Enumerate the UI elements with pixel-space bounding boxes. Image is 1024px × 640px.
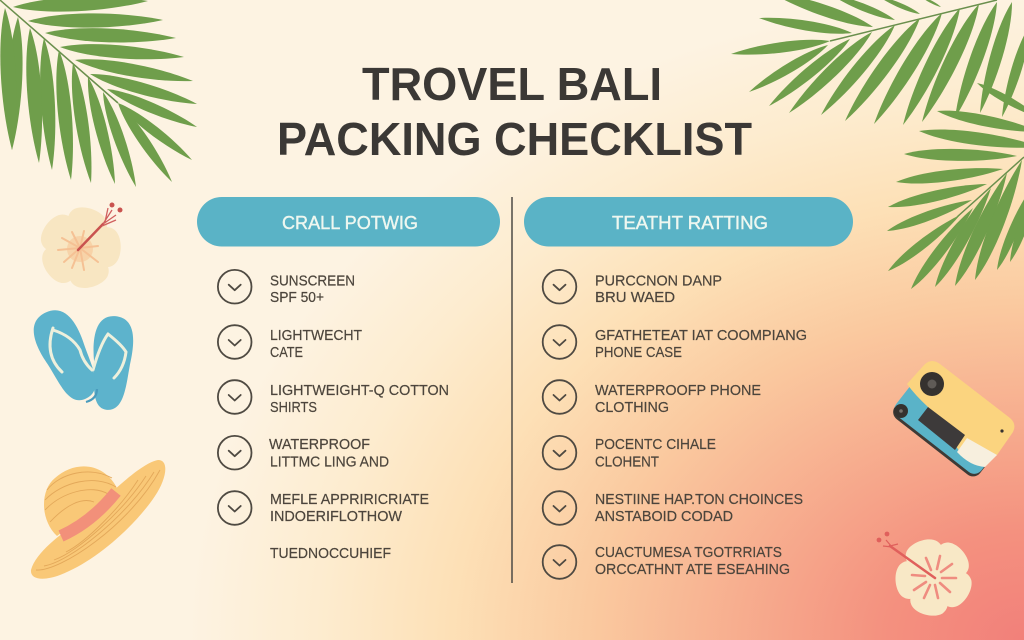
- right item 3: WATERPROOFP PHONE: [595, 383, 761, 399]
- left item 1: [218, 270, 355, 306]
- right item 6: [543, 545, 790, 579]
- title: PACKING CHECKLIST: [277, 113, 752, 165]
- left item 3: LIGHTWEIGHT-Q COTTON: [270, 383, 449, 399]
- right item 2: GFATHETEAT IAT COOMPIANG: [595, 328, 807, 344]
- left item 1: SUNSCREEN: [270, 274, 355, 290]
- right column header: TEATHT RATTING: [612, 213, 768, 233]
- left item 4: LITTMC LING AND: [270, 454, 389, 470]
- left item 4: [218, 436, 389, 470]
- right item 5: [543, 491, 803, 525]
- palm frond: top right: [730, 0, 1024, 128]
- left item 2: CATE: [270, 345, 303, 361]
- right item 2: [543, 325, 807, 361]
- right item 1: PURCCNON DANP: [595, 274, 722, 290]
- icon: straw hat: [31, 460, 165, 579]
- panel: right column: [524, 197, 853, 579]
- right item 5: ANSTABOID CODAD: [595, 509, 733, 525]
- right item 4: [543, 436, 716, 470]
- title: TROVEL BALI: [362, 58, 662, 110]
- right column header: [524, 197, 853, 246]
- left item 2: LIGHTWECHT: [270, 328, 362, 344]
- palm frond: top left: [0, 0, 199, 189]
- left item 2: [218, 325, 362, 361]
- right item 3: [543, 380, 761, 416]
- right item 1: BRU WAED: [595, 290, 675, 306]
- icon: action camera: [890, 360, 1016, 480]
- right item 4: POCENTC CIHALE: [595, 437, 716, 453]
- left item 6: TUEDNOCCUHIEF: [270, 546, 391, 562]
- left item 4: WATERPROOF: [269, 437, 370, 453]
- left item 5: MEFLE APPRIRICRIATE: [270, 492, 429, 508]
- left item 1: SPF 50+: [270, 290, 324, 306]
- left item 5: [218, 491, 429, 525]
- left column header: CRALL POTWIG: [282, 213, 418, 233]
- icon: flip flops: [26, 303, 135, 412]
- divider: [511, 197, 513, 583]
- right item 6: CUACTUMESA TGOTRRIATS: [595, 545, 782, 561]
- right item 3: CLOTHING: [595, 400, 669, 416]
- right item 6: ORCCATHNT ATE ESEAHING: [595, 562, 790, 578]
- left item 3: [218, 380, 449, 416]
- left column header: [197, 197, 500, 246]
- right item 1: [543, 270, 722, 306]
- right item 5: NESTIINE HAP.TON CHOINCES: [595, 492, 803, 508]
- title: [277, 58, 752, 165]
- left item 3: SHIRTS: [270, 400, 317, 416]
- panel: left column: [197, 197, 500, 562]
- right item 2: PHONE CASE: [595, 345, 682, 361]
- right item 4: CLOHENT: [595, 454, 659, 470]
- icon: hibiscus flower, right: [877, 532, 977, 619]
- left item 5: INDOERIFLOTHOW: [270, 509, 402, 525]
- icon: hibiscus flower, left: [35, 202, 122, 292]
- palm frond: right side: [885, 80, 1024, 292]
